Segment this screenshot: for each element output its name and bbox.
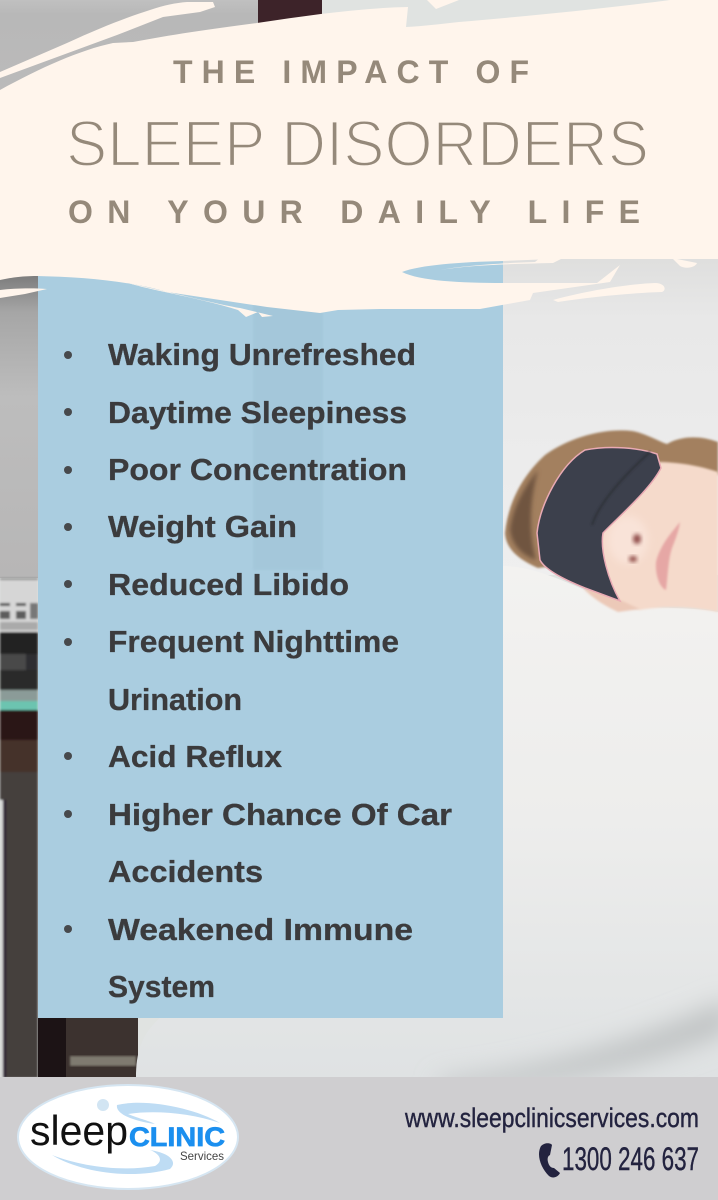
item: Waking Unrefreshed	[108, 337, 416, 372]
item: System	[108, 969, 215, 1004]
item: Acid Reflux	[108, 739, 283, 774]
item: Weakened Immune	[108, 912, 413, 947]
window reflection stripe	[253, 280, 323, 570]
bed	[136, 566, 718, 1078]
logo wordmark accent: CLINIC	[129, 1122, 225, 1152]
title line 2: SLEEP DISORDERS	[66, 107, 649, 180]
bullets	[64, 351, 72, 933]
lips	[656, 522, 680, 590]
sleep mask	[537, 447, 661, 601]
item: Frequent Nighttime	[108, 624, 399, 659]
skin below mask	[583, 588, 640, 612]
nose	[608, 516, 648, 564]
sleeping woman	[505, 430, 718, 612]
nostrils	[633, 534, 641, 544]
bullet list	[64, 337, 452, 1004]
lens sliver	[440, 258, 563, 270]
footer band	[0, 1077, 718, 1200]
item: Accidents	[108, 854, 263, 889]
logo subtitle: Services	[180, 1149, 224, 1163]
phone on bedside table	[0, 578, 38, 1078]
item: Daytime Sleepiness	[108, 395, 407, 430]
title	[66, 54, 649, 230]
item: Reduced Libido	[108, 567, 349, 602]
panel edge streak	[128, 283, 273, 317]
item: Higher Chance Of Car	[108, 797, 452, 832]
item: Urination	[108, 682, 242, 717]
phone icon	[539, 1143, 560, 1177]
logo	[18, 1085, 238, 1189]
title line 3: ON YOUR DAILY LIFE	[68, 194, 640, 230]
logo wordmark: sleep	[30, 1107, 128, 1154]
hair	[505, 430, 718, 568]
top brush tip	[427, 0, 459, 9]
item: Poor Concentration	[108, 452, 407, 487]
logo swooshes	[52, 1099, 220, 1174]
right blob	[672, 258, 697, 268]
hair shading	[510, 470, 538, 560]
right side streak	[553, 283, 665, 302]
bed shadow	[440, 1000, 718, 1095]
face	[590, 462, 718, 612]
item: Weight Gain	[108, 509, 297, 544]
header cream brush shape	[0, 0, 718, 317]
blue text panel	[38, 255, 503, 1018]
left edge streak	[0, 288, 47, 298]
mask seam	[592, 452, 650, 525]
top left brush streak	[0, 2, 215, 78]
title line 1: THE IMPACT OF	[173, 54, 529, 90]
